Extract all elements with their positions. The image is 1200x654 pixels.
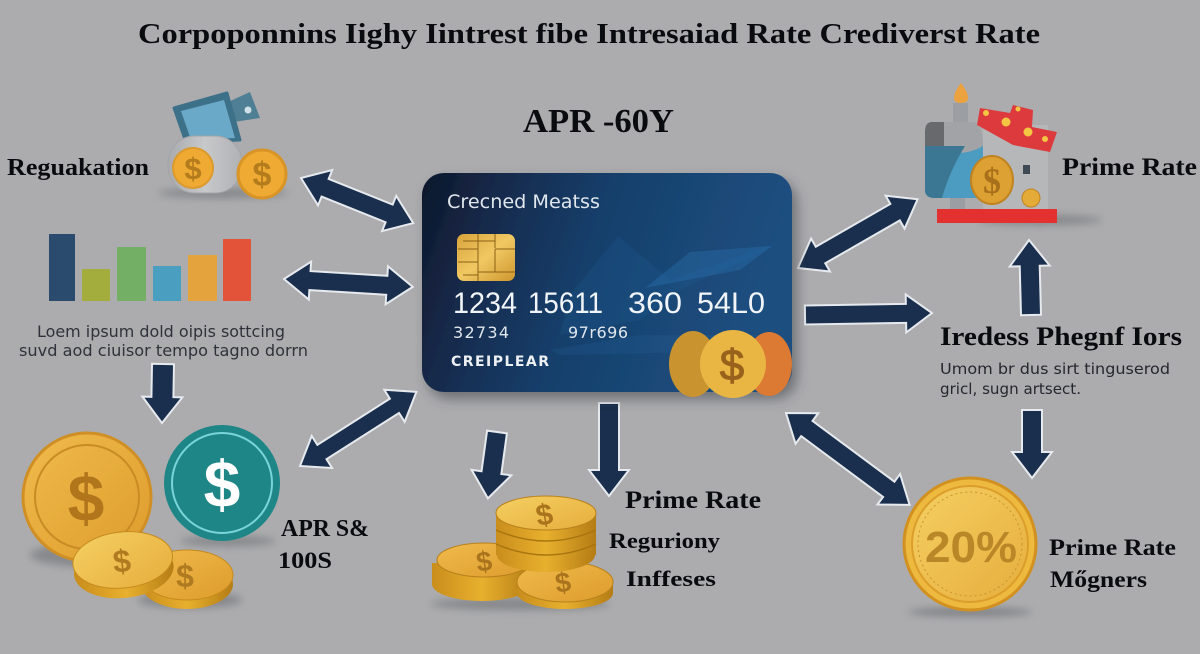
- panel: regulation icon: $: [184, 151, 202, 186]
- card number: 54L0: [697, 287, 765, 320]
- arrow: bars down: [142, 364, 183, 423]
- label: regulatory influences: Reguriony: [609, 528, 720, 553]
- label: regulation: Reguakation: [7, 155, 149, 181]
- icon: teal coin: [164, 425, 280, 546]
- text block: factors: gricl, sugn artsect.: [940, 380, 1081, 398]
- subtitle: APR: APR -60Y: [523, 103, 674, 140]
- arrow: factors down: [1012, 410, 1052, 478]
- heading: factors: Iredess Phegnf Iors: [940, 322, 1182, 351]
- arrow: card to prime rate: [589, 403, 629, 496]
- arrow: card to factors: [805, 294, 932, 334]
- card number: 1234: [453, 287, 517, 320]
- label: APR: APR S&: [281, 516, 369, 542]
- icon: large gold coin: [23, 433, 151, 567]
- icon: coin stacks: $: [533, 498, 556, 533]
- label: APR: [278, 516, 369, 573]
- card sub numbers: [453, 323, 628, 342]
- panel: credit card: [422, 173, 792, 398]
- arrow: card to stack: [468, 429, 517, 501]
- icon: teal coin: $: [204, 447, 240, 521]
- label: prime rate margins: Prime Rate: [1049, 535, 1176, 560]
- icon: small coins: $: [111, 542, 133, 580]
- label: regulatory influences: [609, 528, 720, 591]
- arrow: coins to card: [290, 376, 427, 482]
- bar chart: [49, 234, 251, 301]
- title: Corpoponnins Iighy Iintrest fibe Intresaiad Rate Crediverst Rate: [138, 18, 1040, 50]
- arrow: regulation to card: [294, 160, 420, 241]
- label: prime rate margins: [1049, 535, 1176, 592]
- card sub numbers: 32734: [453, 323, 509, 342]
- card number: [453, 287, 765, 320]
- text block: factors: [940, 360, 1170, 398]
- card number: 15611: [528, 287, 603, 320]
- card number: 360: [628, 287, 682, 320]
- icon: small coins: $: [176, 558, 194, 594]
- text block: lorem: suvd aod ciuisor tempo tagno dorrn: [19, 341, 308, 360]
- card sub numbers: 97r696: [568, 323, 628, 342]
- icon: coin stacks: [430, 496, 613, 610]
- card coins: [669, 330, 792, 398]
- icon: large gold coin: $: [68, 461, 104, 535]
- icon: coin stacks: $: [474, 545, 494, 578]
- label: prime rate middle: Prime Rate: [625, 487, 761, 514]
- arrow: card to 20% coin: [775, 398, 921, 520]
- text block: lorem: [19, 322, 308, 360]
- card heading: Crecned Meatss: [447, 191, 600, 213]
- label: prime rate top: Prime Rate: [1062, 154, 1197, 181]
- label: APR: 100S: [278, 548, 332, 573]
- panel: regulation icon: [158, 92, 288, 198]
- label: prime rate margins: Mőgners: [1050, 567, 1147, 592]
- icon: 20% coin: 20%: [925, 523, 1017, 572]
- icon: small coins: [70, 527, 242, 609]
- arrow: card to bank: [789, 183, 927, 284]
- text block: lorem: Loem ipsum dold oipis sottcing: [37, 322, 285, 341]
- text block: factors: Umom br dus sirt tinguserod: [940, 360, 1170, 378]
- card chip: [457, 234, 515, 281]
- icon: bank with coins: $: [983, 161, 1001, 201]
- label: regulatory influences: Inffeses: [626, 566, 717, 591]
- icon: bank with coins: [925, 83, 1102, 225]
- arrow: bars to card: [283, 260, 414, 306]
- card coins: $: [720, 341, 744, 390]
- panel: regulation icon: $: [253, 156, 272, 194]
- icon: coin stacks: $: [553, 566, 573, 599]
- icon: 20% coin: [904, 478, 1036, 616]
- card holder: CREIPLEAR: [451, 354, 549, 370]
- arrow: factors up: [1009, 240, 1051, 316]
